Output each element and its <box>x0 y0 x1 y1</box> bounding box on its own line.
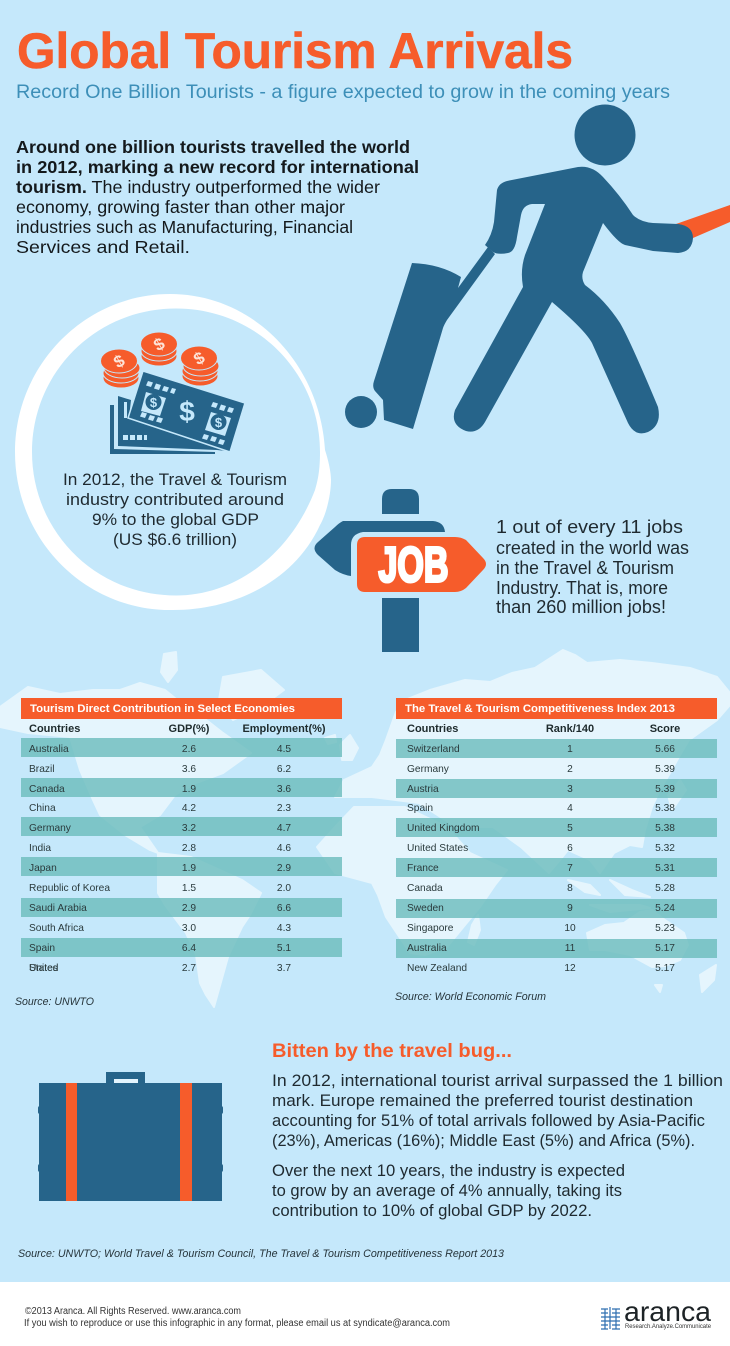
GDP values: 2.8 <box>182 843 196 854</box>
icon: coins and banknotes: $ <box>215 415 223 430</box>
rank values: 8 <box>567 883 573 894</box>
column headers <box>29 723 326 735</box>
country names: Sweden <box>407 903 444 914</box>
travel bug text block: In 2012, international tourist arrival surpassed the 1 billion <box>272 1072 723 1090</box>
country names: Switzerland <box>407 744 460 755</box>
rank values <box>564 744 576 974</box>
rank values: 1 <box>567 744 573 755</box>
country names: Germany <box>29 823 72 834</box>
icon: coins and banknotes: $ <box>179 396 195 427</box>
jobs text block: created in the world was <box>496 538 689 558</box>
GDP values: 2.9 <box>182 903 196 914</box>
intro text block: in 2012, marking a new record for international <box>16 157 419 177</box>
middle coin stack <box>140 332 178 366</box>
title: Global Tourism Arrivals <box>17 23 573 79</box>
employment values: 6.2 <box>277 764 291 775</box>
score values: 5.39 <box>655 784 675 795</box>
score values: 5.66 <box>655 744 675 755</box>
employment values: 2.9 <box>277 863 291 874</box>
GDP text: 9% to the global GDP <box>92 510 259 529</box>
aranca logo: Research.Analyze.Communicate <box>625 1323 711 1330</box>
score values: 5.17 <box>655 943 675 954</box>
table title bar: The Travel & Tourism Competitiveness Index 2013 <box>405 703 675 715</box>
country names: Spain <box>407 803 433 814</box>
country names: Brazil <box>29 764 54 775</box>
country names: Japan <box>29 863 57 874</box>
rank values: 7 <box>567 863 573 874</box>
GDP values: 1.9 <box>182 863 196 874</box>
world map background <box>0 650 730 1007</box>
country names <box>29 744 110 974</box>
copyright text: If you wish to reproduce or use this infographic in any format, please email us at syndicate@aranca.com <box>24 1318 450 1329</box>
country names: South Africa <box>29 923 84 934</box>
rank values: 10 <box>564 923 576 934</box>
intro text block: industries such as Manufacturing, Financial <box>16 217 353 237</box>
copyright text <box>24 1306 450 1329</box>
employment values <box>277 744 291 974</box>
jobs text block: 1 out of every 11 jobs <box>496 517 683 537</box>
score values <box>655 744 675 974</box>
GDP values <box>182 744 196 974</box>
score values: 5.38 <box>655 803 675 814</box>
score values: 5.24 <box>655 903 675 914</box>
score values: 5.39 <box>655 764 675 775</box>
rank values: 3 <box>567 784 573 795</box>
aranca logo: aranca <box>624 1296 711 1327</box>
employment values: 4.3 <box>277 923 291 934</box>
score values: 5.17 <box>655 963 675 974</box>
employment values: 2.0 <box>277 883 291 894</box>
source: World Economic Forum: Source: World Economic Forum <box>395 991 546 1003</box>
employment values: 5.1 <box>277 943 291 954</box>
country names: States <box>29 963 58 974</box>
icon: job signpost <box>314 489 486 652</box>
rank values: 12 <box>564 963 576 974</box>
left coin stack <box>100 349 140 388</box>
GDP text: In 2012, the Travel & Tourism <box>63 470 287 489</box>
subtitle: Record One Billion Tourists - a figure expected to grow in the coming years <box>16 81 670 103</box>
table title bar <box>21 698 342 719</box>
GDP values: 2.6 <box>182 744 196 755</box>
country names: Austria <box>407 784 439 795</box>
row bands <box>21 738 342 957</box>
column headers <box>407 723 680 735</box>
column headers: Countries <box>407 723 458 735</box>
GDP values: 3.6 <box>182 764 196 775</box>
score values: 5.31 <box>655 863 675 874</box>
country names: France <box>407 863 439 874</box>
country names <box>407 744 480 974</box>
country names: Australia <box>29 744 69 755</box>
country names: Germany <box>407 764 450 775</box>
column headers: Countries <box>29 723 80 735</box>
table: tourism direct contribution <box>21 698 342 974</box>
footer <box>0 1282 730 1346</box>
intro text block: Around one billion tourists travelled the world <box>16 137 410 157</box>
rank values: 2 <box>567 764 573 775</box>
score values: 5.23 <box>655 923 675 934</box>
country names: New Zealand <box>407 963 467 974</box>
rank values: 4 <box>567 803 573 814</box>
country names: Canada <box>407 883 443 894</box>
white brush ring <box>15 294 331 610</box>
GDP values: 6.4 <box>182 943 196 954</box>
row bands <box>396 739 717 958</box>
icon: coins and banknotes <box>100 332 245 454</box>
employment values: 4.5 <box>277 744 291 755</box>
icon: coins and banknotes: $ <box>150 395 158 410</box>
rank values: 6 <box>567 843 573 854</box>
GDP values: 1.5 <box>182 883 196 894</box>
travel bug text block: to grow by an average of 4% annually, taking its <box>272 1182 622 1200</box>
travel bug text block: accounting for 51% of total arrivals followed by Asia-Pacific <box>272 1112 705 1130</box>
employment values: 2.3 <box>277 803 291 814</box>
icon: suitcase <box>38 1072 223 1201</box>
GDP text: industry contributed around <box>66 490 284 509</box>
rank values: 5 <box>567 823 573 834</box>
column headers: Score <box>650 723 680 735</box>
icon: job signpost: JOB <box>378 538 448 592</box>
country names: China <box>29 803 56 814</box>
rank values: 9 <box>567 903 573 914</box>
intro text block: economy, growing faster than other major <box>16 197 345 217</box>
travel bug text block: mark. Europe remained the preferred tourist destination <box>272 1092 693 1110</box>
intro text block <box>16 137 419 257</box>
GDP values: 3.0 <box>182 923 196 934</box>
country names: Singapore <box>407 923 454 934</box>
travel bug text block <box>272 1072 723 1220</box>
country names: Spain <box>29 943 55 954</box>
jobs text block: in the Travel & Tourism <box>496 558 674 578</box>
country names: Saudi Arabia <box>29 903 87 914</box>
country names: India <box>29 843 51 854</box>
country names: Australia <box>407 943 447 954</box>
column headers: Employment(%) <box>242 723 326 735</box>
jobs text block: than 260 million jobs! <box>496 597 666 617</box>
score values: 5.38 <box>655 823 675 834</box>
GDP values: 3.2 <box>182 823 196 834</box>
heading: bitten by the travel bug: Bitten by the travel bug... <box>272 1041 512 1062</box>
right coin stack <box>180 346 219 386</box>
copyright text: ©2013 Aranca. All Rights Reserved. www.aranca.com <box>25 1306 241 1317</box>
employment values: 6.6 <box>277 903 291 914</box>
travel bug text block: (23%), Americas (16%); Middle East (5%) and Africa (5%). <box>272 1132 695 1150</box>
GDP text <box>63 470 287 549</box>
country names: United <box>29 963 59 974</box>
table: travel and tourism competitiveness index <box>396 698 717 974</box>
country names: United States <box>407 843 468 854</box>
score values: 5.32 <box>655 843 675 854</box>
source: UNWTO: Source: UNWTO <box>15 996 94 1008</box>
travel bug text block: Over the next 10 years, the industry is expected <box>272 1162 625 1180</box>
jobs text block <box>496 517 689 617</box>
employment values: 3.6 <box>277 784 291 795</box>
country names: Republic of Korea <box>29 883 110 894</box>
score values: 5.28 <box>655 883 675 894</box>
intro text block: Services and Retail. <box>16 237 190 257</box>
right coin stack: $ <box>190 348 209 369</box>
employment values: 4.7 <box>277 823 291 834</box>
source line: Source: UNWTO; World Travel & Tourism Council, The Travel & Tourism Competitiveness Report 2013 <box>18 1248 505 1260</box>
country names: United Kingdom <box>407 823 480 834</box>
intro text block: tourism. The industry outperformed the wider <box>16 177 380 197</box>
table title bar: Tourism Direct Contribution in Select Economies <box>30 703 295 715</box>
table title bar <box>396 698 717 719</box>
travel bug text block: contribution to 10% of global GDP by 2022. <box>272 1202 592 1220</box>
jobs text block: Industry. That is, more <box>496 578 668 598</box>
left coin stack: $ <box>110 351 129 372</box>
GDP values: 1.9 <box>182 784 196 795</box>
column headers: GDP(%) <box>169 723 210 735</box>
employment values: 4.6 <box>277 843 291 854</box>
rank values: 11 <box>565 943 576 954</box>
employment values: 3.7 <box>277 963 291 974</box>
icon: traveller pulling a suitcase <box>345 104 730 433</box>
country names: Canada <box>29 784 65 795</box>
GDP values: 4.2 <box>182 803 196 814</box>
GDP text: (US $6.6 trillion) <box>113 530 237 549</box>
middle coin stack: $ <box>150 334 169 355</box>
panel: GDP contribution circle <box>15 294 331 610</box>
GDP values: 2.7 <box>182 963 196 974</box>
column headers: Rank/140 <box>546 723 594 735</box>
